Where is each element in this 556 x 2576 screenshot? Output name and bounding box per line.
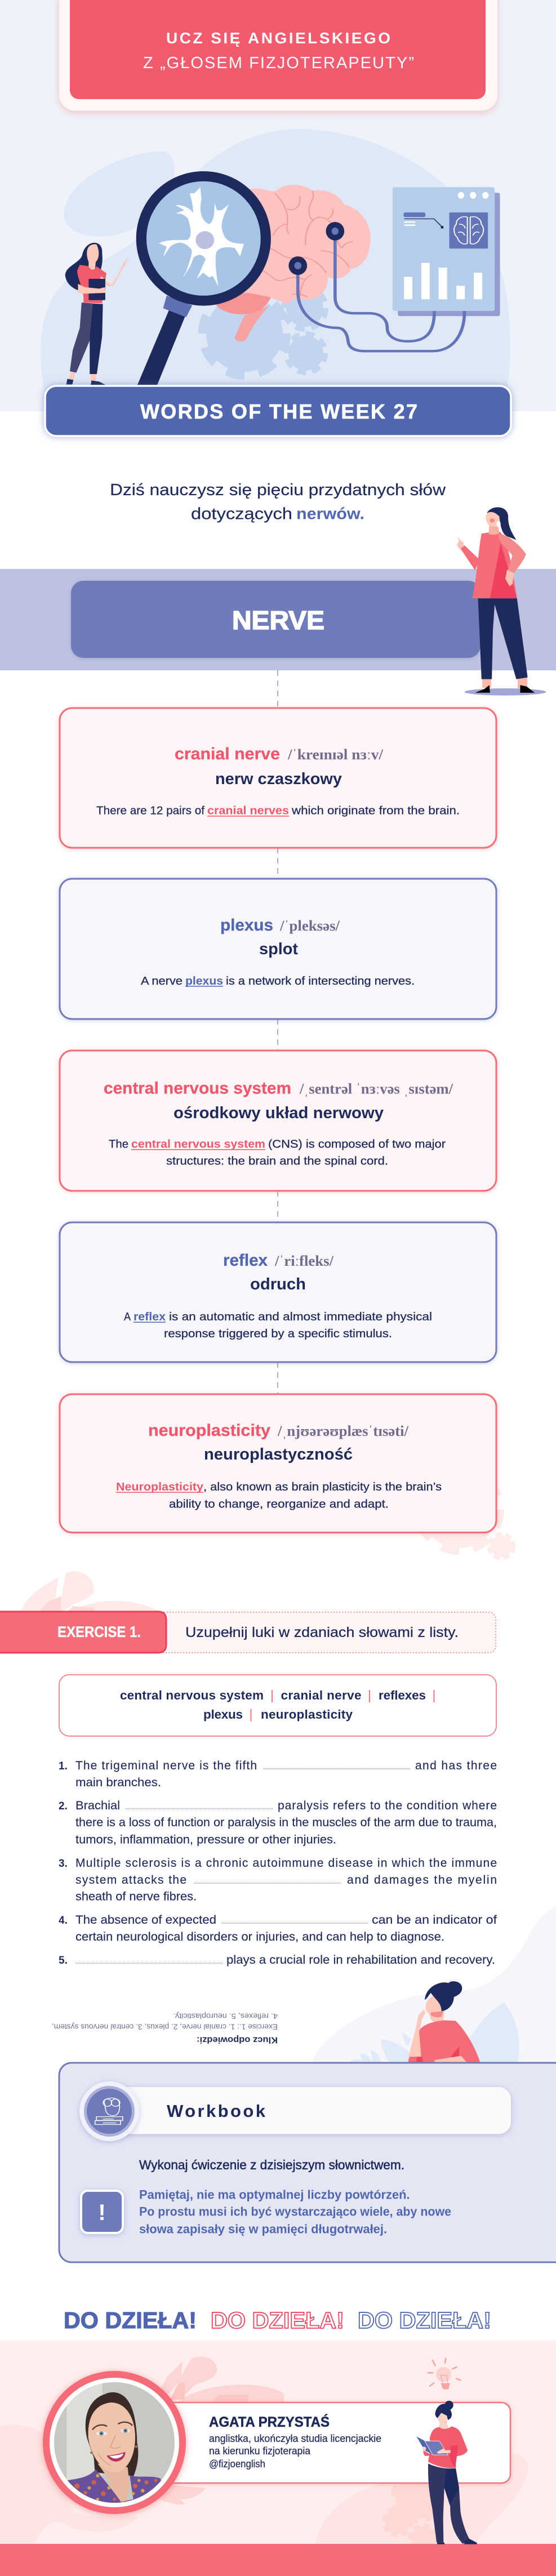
card: cranial nerve: There are 12 pairs of (96, 804, 204, 817)
card: neuroplasticity: ability to change, reorganize and adapt. (169, 1497, 389, 1511)
card: reflex: A (124, 1310, 131, 1323)
sentence 1: and has three (415, 1759, 497, 1772)
band: nerve: NERVE (232, 606, 324, 635)
sentence 4: certain neurological disorders or injuries, and can help to diagnose. (75, 1930, 444, 1943)
gears (206, 290, 323, 372)
word list box: central nervous system (120, 1688, 264, 1702)
card: cranial nerve: which originate from the brain. (291, 804, 460, 817)
intro text (110, 481, 446, 523)
sentence 4: The absence of expected (75, 1914, 216, 1927)
wires and probes (288, 222, 465, 351)
brain (216, 185, 371, 341)
card: central nervous system (60, 1051, 496, 1191)
intro text: Dziś nauczysz się pięciu przydatnych słów (110, 481, 446, 499)
word list box: | (249, 1707, 252, 1721)
tab: exercise 1 (0, 1612, 166, 1653)
author name: AGATA PRZYSTAŚ (209, 2413, 330, 2430)
author description (209, 2433, 381, 2470)
illustration: thinking woman (312, 1906, 556, 2063)
sentence 3: Multiple sclerosis is a chronic autoimmune disease in which the immune (75, 1857, 497, 1870)
upside-down answer key: Exercise 1.: 1. cranial nerve, 2. plexus, 3. central nervous system, (52, 2022, 278, 2031)
illustration: brain research scene (41, 129, 510, 392)
sentence 2: Brachial (75, 1799, 120, 1812)
woman with tablet (65, 243, 128, 385)
panel: workbook (59, 2063, 556, 2262)
card: reflex: reflex (134, 1310, 166, 1323)
sentence 3: 3. (59, 1858, 68, 1870)
card: central nervous system: The (109, 1138, 128, 1150)
exercise heading: Uzupełnij luki w zdaniach słowami z listy. (185, 1625, 459, 1640)
card: central nervous system: (CNS) is composed of two major (268, 1138, 446, 1150)
icon: owl on books (79, 2081, 139, 2141)
card: plexus: is a network of intersecting nerves. (226, 975, 415, 987)
sentence 2: paralysis refers to the condition where (278, 1799, 497, 1812)
heading bar: words of the week (45, 386, 511, 436)
author description: na kierunku fizjoterapia (209, 2445, 311, 2457)
word list box: plexus (203, 1707, 243, 1721)
card: central nervous system: central nervous system (131, 1138, 265, 1150)
upside-down answer key (52, 2012, 278, 2045)
card: central nervous system: central nervous system (104, 1079, 291, 1097)
card: neuroplasticity: Neuroplasticity (116, 1480, 204, 1493)
sentence 3: sheath of nerve fibres. (75, 1890, 197, 1903)
sentence 1: 1. (59, 1760, 68, 1772)
card: neuroplasticity: /ˌnjʊərəʊplæsˈtɪsəti/ (277, 1423, 409, 1439)
title line 1: UCZ SIĘ ANGIELSKIEGO (166, 29, 390, 47)
intro text: dotyczących (191, 505, 292, 523)
sentence 1 (59, 1759, 497, 1789)
connector lines between cards (277, 670, 278, 1394)
band: nerve (0, 569, 556, 670)
card: neuroplasticity: neuroplasticity (148, 1421, 270, 1440)
sentence 4 (59, 1914, 497, 1943)
card: cranial nerve: cranial nerves (207, 804, 289, 817)
heading bar: words of the week: WORDS OF THE WEEK 27 (140, 400, 417, 423)
sentence 1: main branches. (75, 1776, 161, 1789)
card: reflex: /ˈriːfleks/ (274, 1253, 334, 1269)
upside-down answer key: Klucz odpowiedzi: (197, 2035, 278, 2045)
sentence 5: 5. (59, 1955, 68, 1967)
word list box: neuroplasticity (261, 1707, 353, 1721)
card: plexus: plexus (185, 975, 223, 987)
card: reflex (60, 1222, 496, 1362)
illustration: standing woman pointing (457, 508, 546, 696)
intro text: nerwów. (296, 505, 364, 523)
sentence 5: plays a crucial role in rehabilitation and recovery. (226, 1954, 495, 1967)
card: central nervous system: /ˌsentrəl ˈnɜːvəs ˌsɪstəm/ (299, 1080, 453, 1097)
reminder text: Pamiętaj, nie ma optymalnej liczby powtórzeń. (139, 2188, 410, 2201)
author photo (43, 2371, 186, 2520)
workbook header (79, 2081, 511, 2141)
upside-down answer key: 4. reflexes, 5. neuroplasticity. (174, 2012, 278, 2020)
workbook header: Workbook (167, 2101, 266, 2121)
card: reflex: response triggered by a specific stimulus. (164, 1327, 392, 1340)
sentence 4: 4. (59, 1915, 68, 1927)
footer strip (0, 2544, 556, 2576)
sentence 3 (59, 1857, 497, 1903)
card: plexus: plexus (220, 916, 273, 935)
card: neuroplasticity (60, 1394, 496, 1532)
workbook instruction: Wykonaj ćwiczenie z dzisiejszym słownictwem. (139, 2157, 404, 2172)
title line 2: Z „GŁOSEM FIZJOTERAPEUTY” (143, 54, 414, 72)
header background (0, 0, 556, 411)
word list box: cranial nerve (281, 1688, 362, 1702)
sentence 3: and damages the myelin (347, 1874, 497, 1887)
sentence 3: system attacks the (75, 1874, 186, 1887)
card: cranial nerve: nerw czaszkowy (215, 770, 342, 788)
word list box: | (270, 1688, 274, 1702)
card: neuroplasticity: neuroplastyczność (204, 1445, 353, 1463)
sentence 2: 2. (59, 1800, 68, 1812)
exercise sentences (59, 1759, 497, 1967)
decorative pink gears (421, 1471, 512, 1557)
word list box: | (433, 1688, 435, 1702)
sentence 2 (59, 1799, 497, 1847)
card: reflex: odruch (250, 1275, 306, 1293)
reminder text (139, 2188, 451, 2236)
card: neuroplasticity: , also known as brain plasticity is the brain’s (203, 1480, 442, 1493)
author description: @fizjoenglish (209, 2458, 265, 2470)
word list box: reflexes (379, 1688, 426, 1702)
do dzieła heading: DO DZIEŁA! (358, 2307, 491, 2333)
background blobs (41, 129, 510, 392)
exercise heading (0, 1612, 496, 1653)
icon: exclamation: ! (98, 2200, 106, 2225)
word list box (59, 1675, 496, 1736)
word list box: | (368, 1688, 371, 1702)
do dzieła heading: DO DZIEŁA! (211, 2307, 344, 2333)
sentence 2: tumors, inflammation, pressure or other injuries. (75, 1833, 336, 1847)
card: central nervous system: ośrodkowy układ nerwowy (174, 1104, 384, 1122)
reminder text: Po prostu musi ich być wystarczająco wiele, aby nowe (139, 2205, 451, 2218)
card: cranial nerve (60, 708, 496, 848)
illustration: woman reading and light bulb (416, 2359, 477, 2544)
card: central nervous system: structures: the brain and the spinal cord. (166, 1155, 388, 1167)
card: cranial nerve: /ˈkreɪnɪəl nɜːv/ (287, 746, 384, 763)
card: cranial nerve: cranial nerve (175, 745, 280, 763)
woman (416, 2401, 477, 2544)
icon: light bulb (428, 2359, 461, 2390)
author description: anglistka, ukończyła studia licencjackie (209, 2433, 381, 2444)
monitor panel with chart (393, 187, 500, 316)
card: reflex: reflex (223, 1251, 268, 1270)
do dzieła heading (64, 2307, 491, 2333)
card: reflex: is an automatic and almost immediate physical (169, 1310, 432, 1323)
do dzieła heading: DO DZIEŁA! (64, 2307, 197, 2333)
footer background (0, 2341, 556, 2576)
tab: exercise 1: EXERCISE 1. (57, 1623, 141, 1640)
sentence 5 (59, 1954, 495, 1967)
footer gears (385, 2474, 441, 2551)
sentence 2: there is a loss of function or paralysis in the muscles of the arm due to trauma, (75, 1816, 497, 1829)
card: plexus: splot (259, 940, 298, 958)
title banner (59, 0, 497, 110)
icon: exclamation (81, 2191, 123, 2233)
author card (146, 2403, 510, 2483)
reminder text: słowa zapisały się w pamięci długotrwałej. (139, 2222, 387, 2236)
sentence 1: The trigeminal nerve is the fifth (75, 1759, 257, 1772)
card: plexus: A nerve (141, 975, 183, 987)
decorative pink leaves (21, 1571, 159, 1612)
sentence 4: can be an indicator of (372, 1914, 497, 1927)
card: plexus: /ˈpleksəs/ (279, 918, 340, 934)
magnifying glass with neuron (136, 171, 271, 386)
card: plexus (60, 879, 496, 1019)
